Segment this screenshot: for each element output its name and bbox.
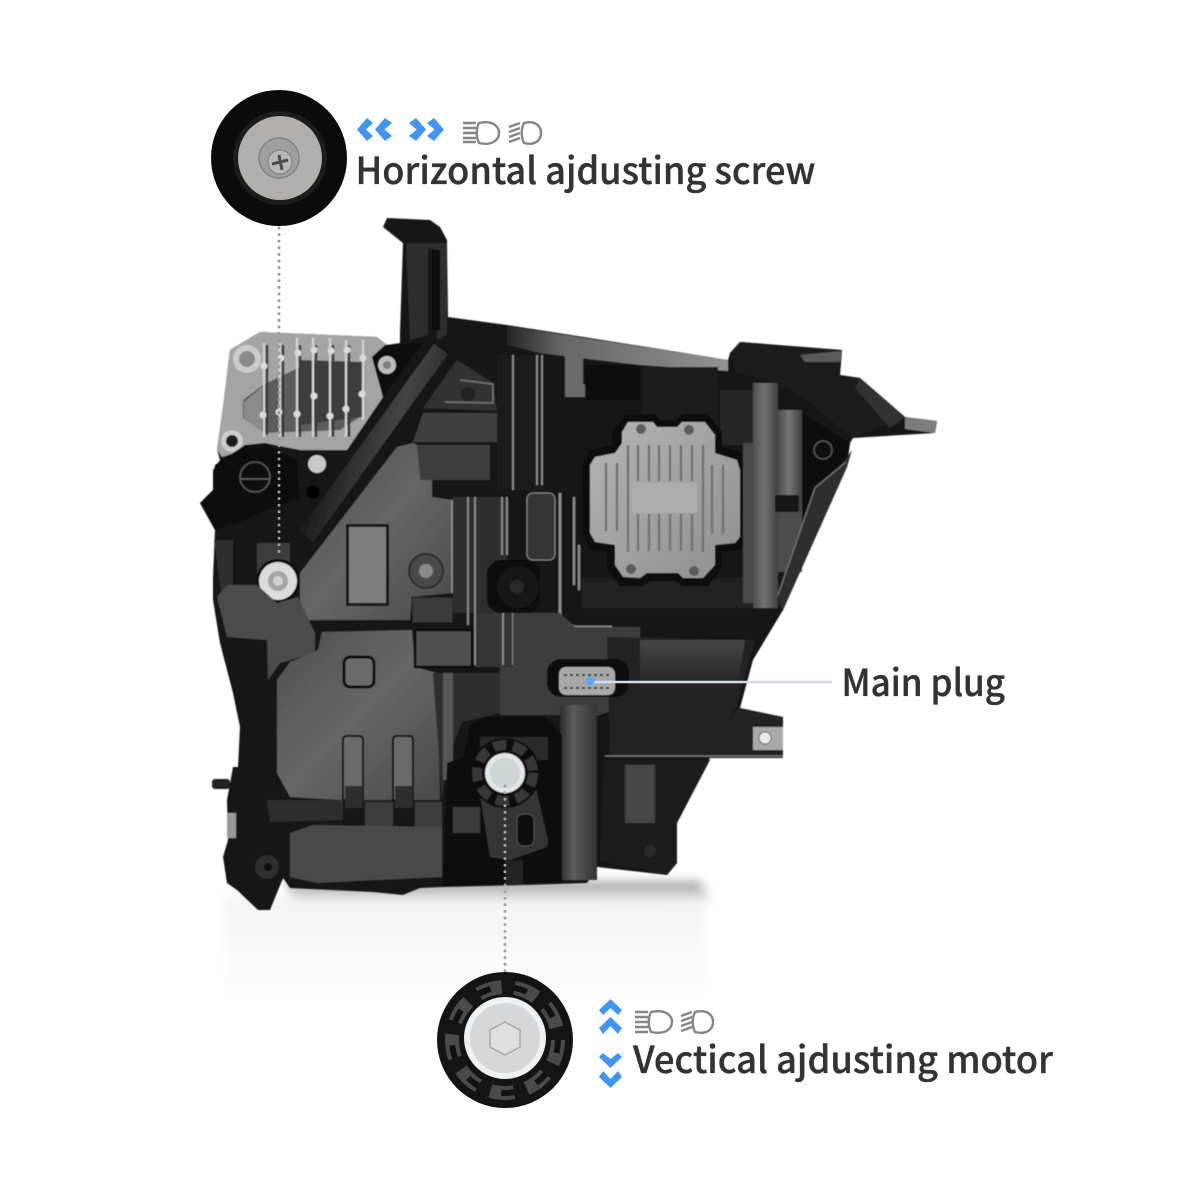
label: main plug: Main plug (842, 653, 1005, 707)
lower mid box (412, 597, 453, 623)
top bracket highlight (406, 243, 447, 340)
silver control module (582, 414, 748, 586)
right lower chamber (607, 637, 755, 757)
main plug leader line (586, 676, 832, 686)
headlamp housing (200, 218, 937, 910)
main plug connector (547, 659, 629, 697)
dark chamber behind module (543, 365, 753, 627)
right lower housing (600, 760, 710, 875)
label window (346, 524, 389, 606)
plate screws (233, 345, 261, 373)
upper gray panel (413, 413, 500, 442)
round boss (409, 554, 443, 588)
icon: up arrows (599, 999, 622, 1034)
square button (344, 657, 374, 687)
central band (500, 613, 640, 715)
centre column (452, 355, 567, 667)
ledge behind tube (423, 360, 497, 411)
white pivot bolt (256, 559, 300, 603)
detail circle: horizontal adjusting screw (211, 90, 347, 226)
mounting pin (212, 779, 230, 789)
side bracket with nut (605, 708, 783, 758)
large lower panel (277, 630, 440, 800)
motor recess (443, 717, 562, 886)
housing silhouette (200, 218, 937, 910)
slot two (393, 736, 413, 800)
central vertical strips (433, 673, 500, 800)
metal heat sink plate (217, 332, 387, 457)
right cylinders (743, 383, 802, 608)
lower left mount (227, 813, 290, 908)
icon: down arrows (599, 1053, 622, 1088)
dotted leader: vertical motor (504, 786, 506, 972)
black anchor (487, 560, 540, 613)
icon: low beam (463, 122, 499, 144)
left mid panel (300, 443, 452, 620)
heading: horizontal adjusting screw: Horizontal ajdusting screw (356, 141, 816, 195)
panel lower band (267, 786, 413, 822)
left knob housing (200, 443, 300, 620)
heading: vertical adjusting motor: Vectical ajdusting motor (632, 1030, 1054, 1084)
icon: left arrows (357, 118, 392, 141)
floor shadow and reflection (225, 882, 712, 1005)
icon: right arrows (409, 118, 444, 141)
diagonal tube (299, 344, 448, 542)
dotted leader: horizontal screw (278, 228, 280, 556)
icon: high beam (681, 1011, 713, 1033)
detail circle: vertical adjusting motor (437, 972, 573, 1108)
lower block (290, 825, 442, 883)
upper inset block (415, 630, 472, 667)
lower left block (217, 585, 315, 680)
right bracket (730, 342, 937, 610)
icon: low beam (635, 1011, 672, 1033)
slot one (343, 736, 363, 800)
icon: high beam (509, 122, 541, 144)
top edge strip (507, 326, 728, 371)
main post (560, 705, 597, 880)
vertical motor (470, 738, 548, 885)
bracket pieces beside tube (300, 343, 423, 510)
